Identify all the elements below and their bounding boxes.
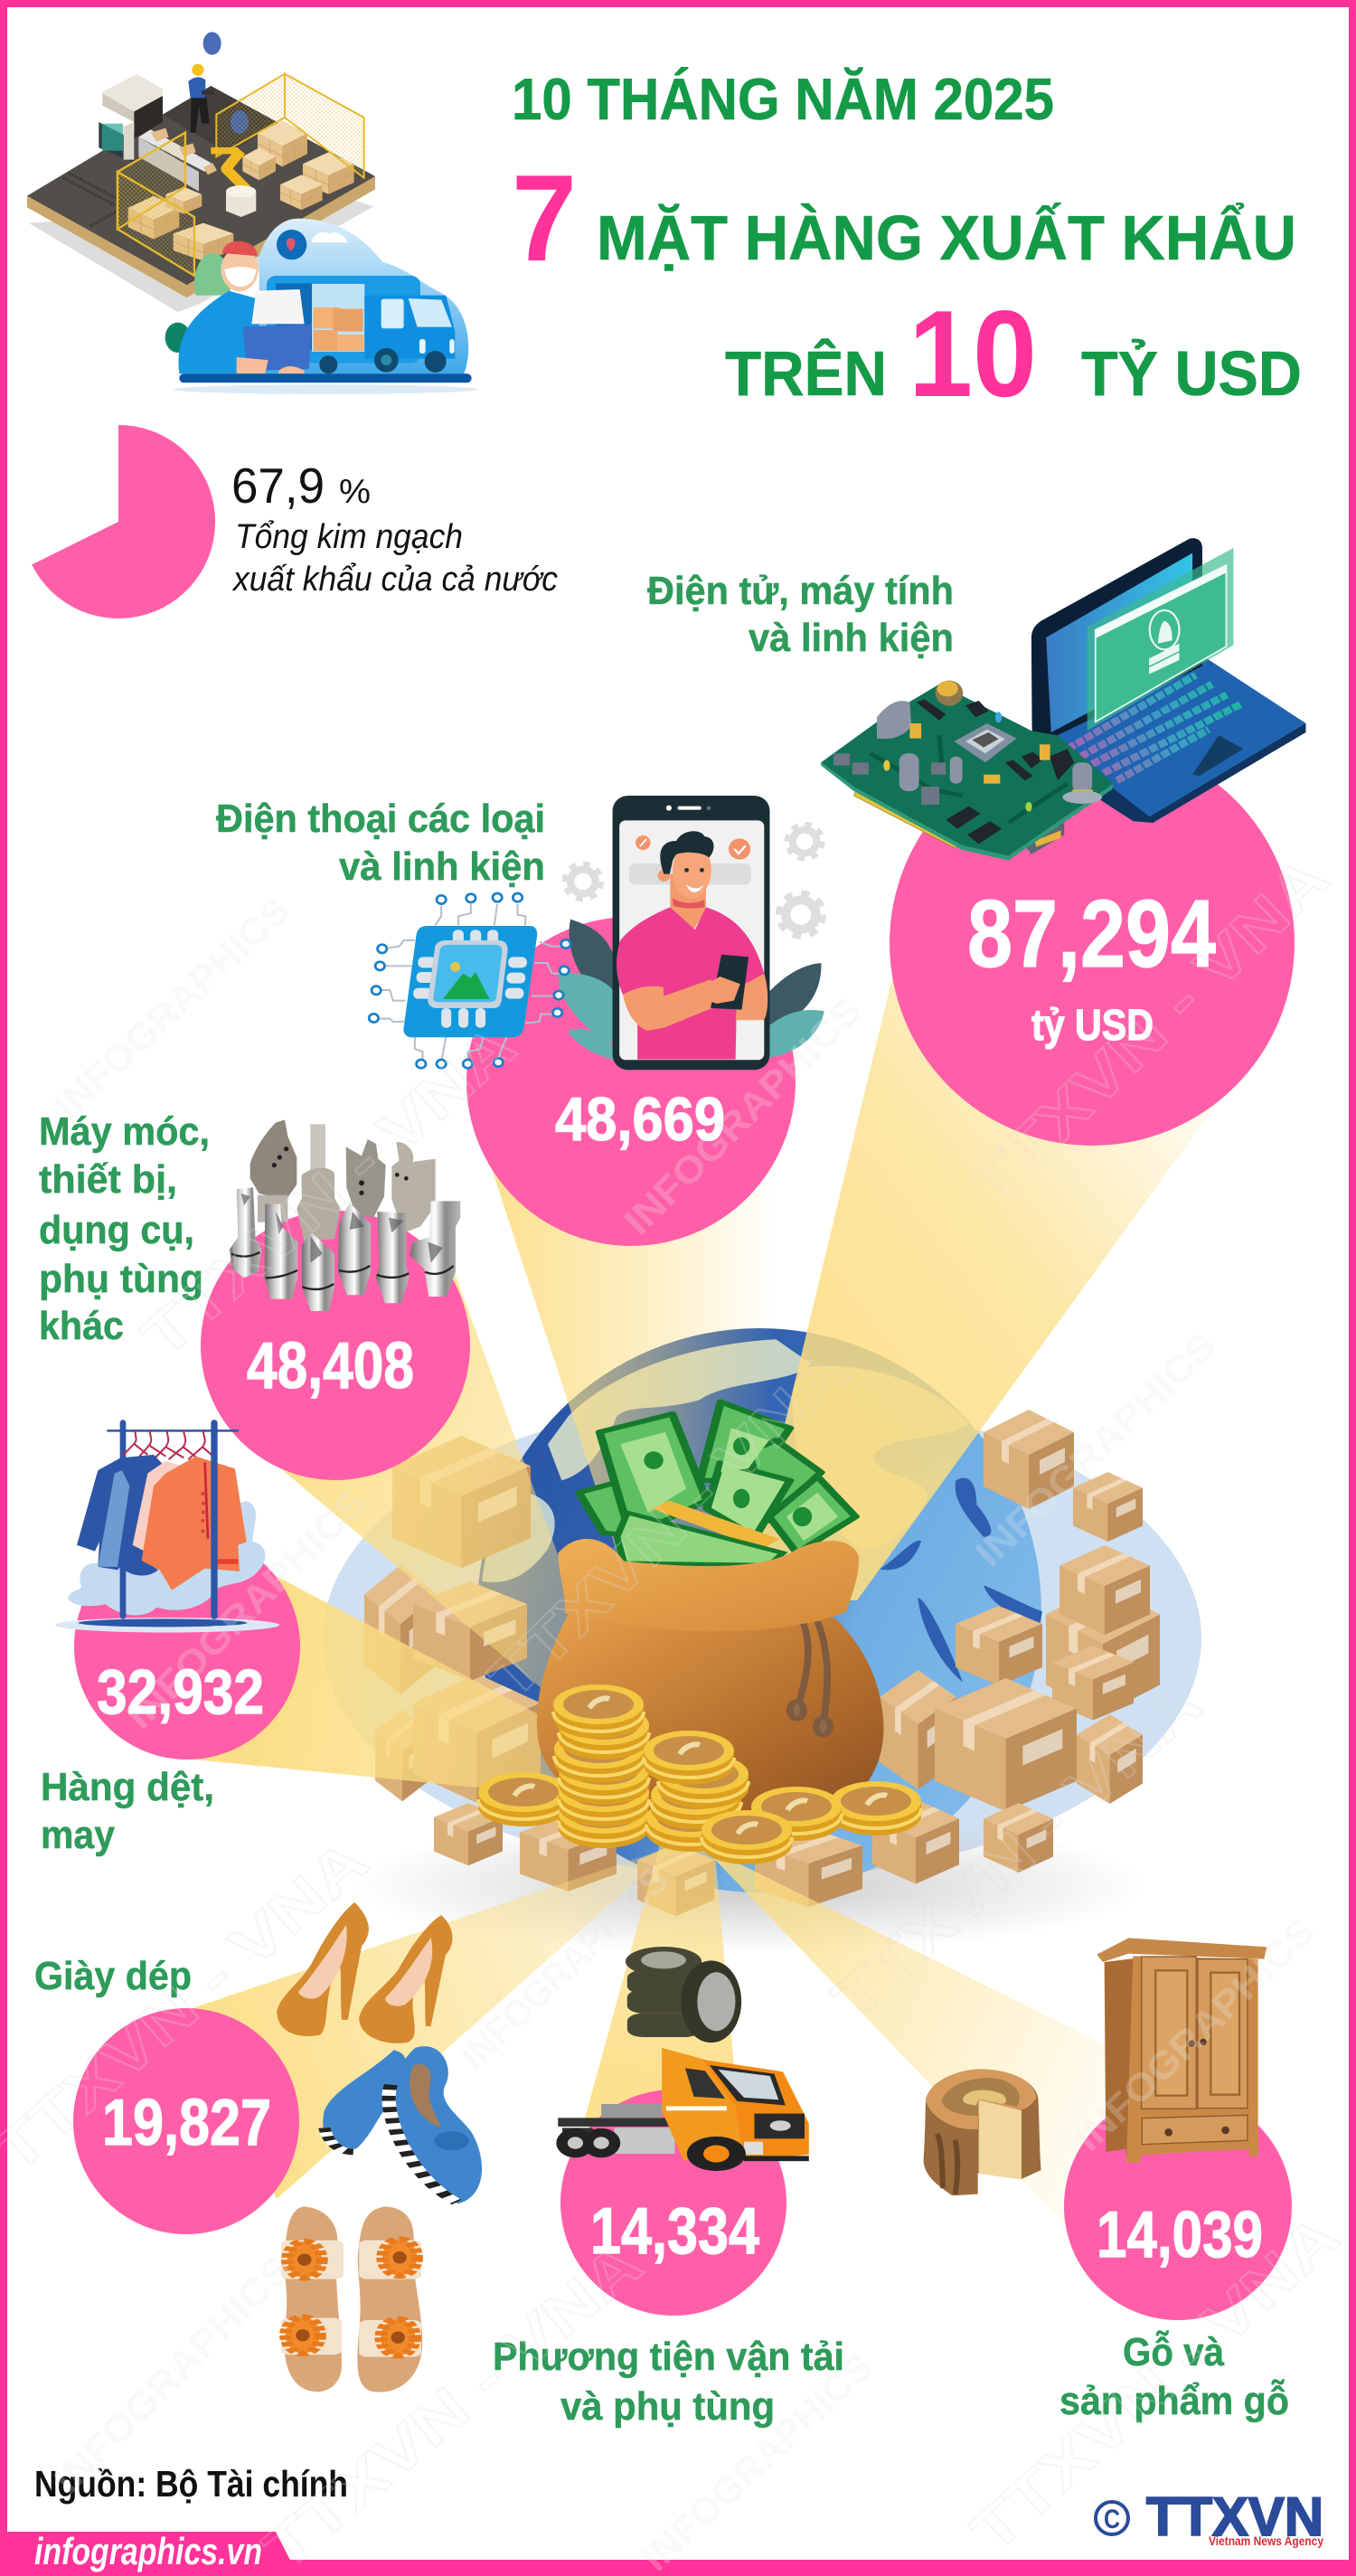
watermarks: TTXVN - VNA: [250, 2230, 654, 2576]
label: wood: sản phẩm gỗ: [1059, 2378, 1289, 2423]
small parts: [833, 712, 1050, 812]
tool cylinders front row: [230, 1187, 460, 1311]
heel left: [277, 1902, 369, 2036]
flat coins: [831, 1781, 921, 1835]
label: textiles: [41, 1765, 214, 1857]
circle: machinery value: [201, 1211, 470, 1480]
icon: clothes rack: [55, 1420, 279, 1633]
continent: north: [548, 1339, 811, 1480]
drawstring: [790, 1621, 830, 1735]
globe: [477, 1328, 1042, 1892]
circuit board: [821, 681, 1114, 861]
share caption line 1: Tổng kim ngạch: [235, 518, 463, 556]
gold coins: [478, 1684, 921, 1864]
label: wood: [1059, 2329, 1289, 2423]
label: footwear: Giày dép: [34, 1954, 192, 1998]
values: [97, 881, 1263, 2271]
small ICs: [917, 699, 1074, 844]
watermarks: [0, 844, 1352, 2576]
circle: wood value: [1064, 2092, 1292, 2320]
watermarks: TTXVN - VNA: [956, 844, 1342, 1218]
icon: blue loafers: [323, 2046, 482, 2203]
blue jacket: [77, 1455, 163, 1576]
source note: Nguồn: Bộ Tài chính: [34, 2463, 348, 2505]
beam: footwear: [190, 1845, 678, 2199]
side panel: [1105, 1958, 1142, 2163]
value 48,408: 48,408: [247, 1330, 414, 1402]
watermarks: INFOGRAPHICS: [118, 1480, 374, 1737]
icon: tyres: [626, 1947, 741, 2043]
value 48,669: 48,669: [555, 1085, 725, 1154]
TTXVN logo: [1096, 2486, 1323, 2548]
watermarks: TTXVN - VNA: [129, 1012, 528, 1371]
label: wood: Gỗ và: [1123, 2329, 1224, 2374]
sea patch 3: [880, 1541, 921, 1570]
sea patch 1: [956, 1478, 991, 1537]
circle: vehicles value: [560, 2090, 786, 2316]
bag collar: [558, 1539, 859, 1631]
website: infographics.vn: [34, 2530, 262, 2572]
laptop base: [1044, 656, 1305, 823]
title line 2: MẶT HÀNG XUẤT KHẨU: [597, 202, 1296, 273]
inner shoes: [298, 1925, 432, 2006]
copyright mark: C: [1104, 2505, 1120, 2534]
phone body: [613, 796, 769, 1070]
beam: phones: [479, 1130, 785, 1600]
knobs: [1164, 2039, 1229, 2137]
watermarks: INFOGRAPHICS: [616, 989, 870, 1242]
circle: phones value: [466, 917, 796, 1246]
title line 1: 10 THÁNG NĂM 2025: [512, 66, 1054, 132]
front frame: [1126, 1956, 1258, 2163]
man: [617, 831, 767, 1060]
label: textiles: Hàng dệt,: [41, 1765, 214, 1809]
robot arm: [203, 110, 256, 217]
cornice: [1097, 1938, 1267, 1962]
door right: [1198, 1959, 1248, 2109]
continent: northeast: [792, 1366, 970, 1550]
big pink 10: 10: [909, 285, 1037, 422]
money bag: [537, 1401, 883, 1816]
label: machinery: phụ tùng: [39, 1257, 203, 1301]
chip: [954, 723, 1017, 762]
label: machinery: [39, 1109, 210, 1348]
factory floor: [27, 86, 375, 312]
icon: wardrobe: [1097, 1938, 1267, 2163]
value 87,294: 87,294: [967, 881, 1216, 987]
watermarks: TTXVN - VNA: [820, 1668, 1214, 2033]
continent: west: [482, 1493, 555, 1582]
left loafer: [323, 2050, 407, 2154]
label: machinery: dụng cụ,: [39, 1208, 194, 1252]
watermarks: INFOGRAPHICS: [634, 2345, 880, 2576]
patterned soles: [325, 2085, 457, 2203]
title word TRÊN: TRÊN: [725, 337, 887, 409]
chip: [369, 893, 570, 1068]
cloud: [68, 1502, 265, 1615]
front bill: [617, 1513, 783, 1565]
circle: electronics value: [890, 741, 1295, 1146]
orange shirt: [142, 1457, 247, 1590]
beam: machinery: [244, 1266, 601, 1704]
icon: wood stump: [924, 2069, 1041, 2195]
icon: phone with man, chip and gears: [369, 796, 824, 1070]
unit tỷ USD: tỷ USD: [1031, 1002, 1154, 1050]
watermarks: INFOGRAPHICS: [452, 1858, 676, 2077]
title words TỶ USD: TỶ USD: [1081, 338, 1302, 409]
watermarks: INFOGRAPHICS: [1067, 1910, 1323, 2159]
icon: high heels: [277, 1902, 453, 2043]
label: machinery: khác: [39, 1304, 124, 1348]
footer tab: [0, 2530, 298, 2576]
leaves: [558, 920, 824, 1061]
beam: textiles: [194, 1569, 597, 1799]
icon: laptop and circuit board: [821, 538, 1305, 861]
pallet stacks: [128, 120, 354, 261]
label: phones: Điện thoại các loại: [216, 797, 545, 841]
illustration: factory and delivery truck: [27, 32, 477, 394]
laptop lid: [1031, 538, 1202, 741]
share percentage: 67,9: [231, 458, 325, 514]
label: phones: và linh kiện: [339, 845, 545, 889]
label: electronics: [647, 569, 954, 660]
pie chart 67.9%: [32, 425, 215, 618]
flatbed: [558, 2104, 701, 2154]
gold bar: [652, 1501, 779, 1549]
icon: flower sandals: [281, 2206, 422, 2392]
door left: [1142, 1957, 1196, 2109]
drawer: [1142, 2115, 1248, 2145]
right loafer: [390, 2046, 482, 2203]
watermarks: INFOGRAPHICS: [46, 888, 298, 1128]
banknotes: [579, 1401, 855, 1553]
pink shirt: [133, 1461, 181, 1558]
heel right: [359, 1915, 453, 2043]
icon: truck: [556, 2048, 809, 2171]
beam: wood: [701, 1845, 1121, 2260]
label: vehicles: Phương tiện vận tải: [493, 2335, 844, 2379]
sea patch 2: [918, 1585, 1042, 1682]
capacitors: [877, 681, 1102, 804]
coin stack left: [553, 1684, 649, 1848]
circle: footwear value: [73, 2008, 299, 2234]
icon: machine tools: [230, 1119, 460, 1311]
value 32,932: 32,932: [97, 1656, 264, 1727]
label: electronics: Điện tử, máy tính: [647, 569, 954, 613]
label: textiles: may: [41, 1813, 115, 1857]
title: [512, 66, 1302, 422]
safety fences: [118, 74, 364, 276]
halo behind globe: [323, 1399, 1201, 1878]
watermarks: TTXVN - VNA: [476, 1337, 861, 1712]
beam: electronics: [742, 940, 1237, 1600]
value 14,334: 14,334: [590, 2195, 759, 2268]
value 14,039: 14,039: [1097, 2199, 1263, 2271]
tool blocks back row: [250, 1119, 436, 1241]
label: electronics: và linh kiện: [749, 616, 954, 660]
label: vehicles: và phụ tùng: [560, 2384, 775, 2429]
watermarks: TTXVN - VNA: [958, 2201, 1352, 2565]
delivery scene: [165, 219, 477, 394]
worker: [188, 32, 221, 133]
watermarks: INFOGRAPHICS: [967, 1325, 1224, 1574]
light beams: [190, 940, 1237, 2260]
gears: [565, 825, 823, 936]
share caption line 2: xuất khẩu của cả nước: [231, 561, 558, 599]
rack frame: [107, 1420, 239, 1619]
label: vehicles: [493, 2335, 844, 2429]
label: machinery: Máy móc,: [39, 1109, 210, 1154]
label: phones: [216, 797, 545, 889]
copyright mark: [1096, 2502, 1128, 2534]
wheels: [556, 2128, 809, 2171]
floor: [55, 1618, 279, 1633]
front pole: [211, 1420, 218, 1619]
inner: [410, 2064, 441, 2128]
coin stack right: [644, 1731, 792, 1864]
circle: textiles value: [74, 1533, 300, 1760]
door panels: [1155, 1970, 1187, 2096]
cardboard boxes around globe: [364, 1410, 1160, 1916]
bag body: [537, 1613, 883, 1816]
value 19,827: 19,827: [102, 2087, 271, 2159]
beam: vehicles: [583, 1845, 734, 2125]
dark band marks: [231, 1252, 454, 1289]
percent sign: %: [339, 473, 371, 511]
ground shadow: [353, 1817, 1148, 1953]
tagline: Vietnam News Agency: [1209, 2534, 1323, 2548]
hologram window: [1088, 548, 1233, 731]
share statistic text: [231, 458, 558, 599]
dark patches: [241, 1194, 443, 1263]
watermarks: INFOGRAPHICS: [45, 2248, 299, 2501]
category labels: [34, 569, 1289, 2429]
label: machinery: thiết bị,: [39, 1157, 177, 1202]
big pink 7: 7: [512, 149, 577, 287]
wordmark: TTXVN: [1146, 2486, 1323, 2547]
scanner machine: [99, 74, 196, 163]
cab: [662, 2048, 809, 2160]
